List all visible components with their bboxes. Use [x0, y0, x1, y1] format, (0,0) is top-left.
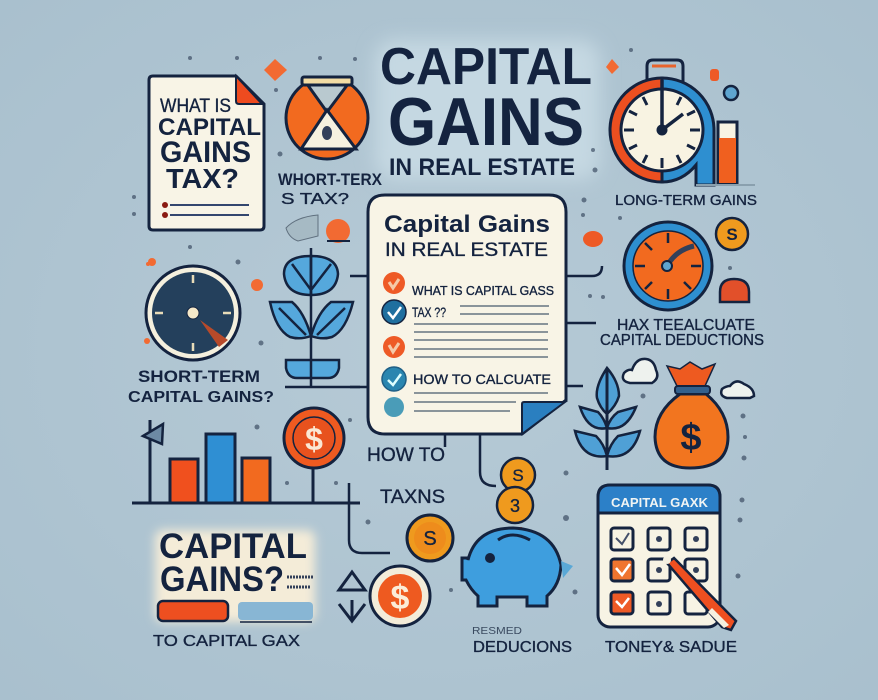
icon: red dollar coin: $: [391, 579, 410, 617]
scattered specks: [132, 48, 747, 594]
panel: what is capital gains tax document: [149, 76, 264, 230]
icon: stacked coins: 3: [510, 496, 520, 516]
icon: orange coin: S: [423, 528, 437, 550]
panel: capital gains callout: GAINS?: [160, 560, 284, 599]
checklist text: TAX ??: [412, 304, 446, 320]
icon: orange diamonds and small shape: [264, 59, 350, 243]
main title: GAINS: [388, 84, 584, 160]
toney sadue label: TONEY& SADUE: [605, 639, 737, 656]
icon: piggy bank: [462, 527, 573, 606]
panel: capital gains in real estate checklist: IN REAL ESTATE: [385, 240, 548, 261]
short-term capital gains label: SHORT-TERM: [138, 367, 260, 386]
icon: stopwatch long-term: [610, 60, 755, 185]
icon: orange coin: [407, 515, 453, 561]
icon: calendar: [598, 485, 720, 627]
icon: right coin: [716, 218, 748, 250]
panel: capital gains callout: [155, 527, 315, 622]
icon: short-term gauge: [146, 266, 240, 360]
panel: what is capital gains tax document: CAPITAL: [158, 114, 261, 141]
checklist text: [412, 283, 554, 411]
icon: stacked coins: S: [512, 466, 524, 485]
short-term tax label: S TAX?: [281, 191, 349, 208]
icon: up and down arrows: [339, 572, 365, 621]
short-term tax label: [278, 170, 383, 208]
deductions label: RESMED: [472, 626, 522, 637]
short-term tax label: WHORT-TERX: [278, 170, 383, 189]
how to taxns label: TAXNS: [380, 487, 445, 508]
panel: what is capital gains tax document: TAX?: [166, 163, 239, 194]
icon: hourglass: [286, 77, 368, 159]
icon: red dome: [720, 279, 749, 302]
icon: stacked coins: [497, 458, 535, 523]
small decorations top right: [583, 59, 738, 247]
short-term capital gains label: [128, 367, 274, 406]
deductions label: [472, 626, 572, 656]
icon: dollar coin on stem: [284, 408, 344, 503]
main title: [375, 38, 600, 181]
short-term capital gains label: CAPITAL GAINS?: [128, 389, 274, 406]
main title: IN REAL ESTATE: [389, 154, 575, 181]
icon: dollar coin on stem: $: [305, 421, 323, 457]
icon: plant: [270, 248, 360, 387]
panel: what is capital gains tax document: GAINS: [160, 136, 251, 169]
tax deductions label: [600, 317, 764, 349]
tax deductions label: HAX TEEALCUATE: [617, 317, 755, 334]
icon: money bag: [655, 362, 728, 468]
panel: what is capital gains tax document: WHAT IS: [160, 96, 231, 117]
how to taxns label: [367, 445, 445, 508]
checklist text: WHAT IS CAPITAL GASS: [412, 283, 554, 298]
long-term gains label: LONG-TERM GAINS: [615, 192, 757, 209]
icon: calendar: CAPITAL GAXK: [611, 495, 709, 510]
icon: leaf plant: [575, 368, 640, 470]
panel: capital gains callout: CAPITAL: [159, 527, 307, 566]
tax deductions label: CAPITAL DEDUCTIONS: [600, 332, 764, 349]
main title: CAPITAL: [380, 38, 592, 96]
to capital gax label: TO CAPITAL GAX: [153, 633, 300, 650]
deductions label: DEDUCIONS: [473, 639, 572, 656]
how to taxns label: HOW TO: [367, 445, 445, 466]
icon: red dollar coin: [370, 566, 430, 626]
connector lines: [349, 266, 602, 553]
bar chart: [132, 420, 360, 503]
check icons: [382, 272, 406, 417]
small orange marks: [144, 258, 263, 344]
panel: capital gains in real estate checklist: [368, 195, 566, 434]
icon: right coin: S: [726, 225, 738, 244]
icon: clouds: [623, 359, 754, 398]
icon: money bag: $: [680, 417, 702, 459]
checklist text: HOW TO CALCUATE: [413, 371, 551, 387]
panel: capital gains in real estate checklist: Capital Gains: [384, 211, 550, 238]
icon: right gauge: [624, 222, 712, 310]
icon: pen: [663, 556, 736, 630]
